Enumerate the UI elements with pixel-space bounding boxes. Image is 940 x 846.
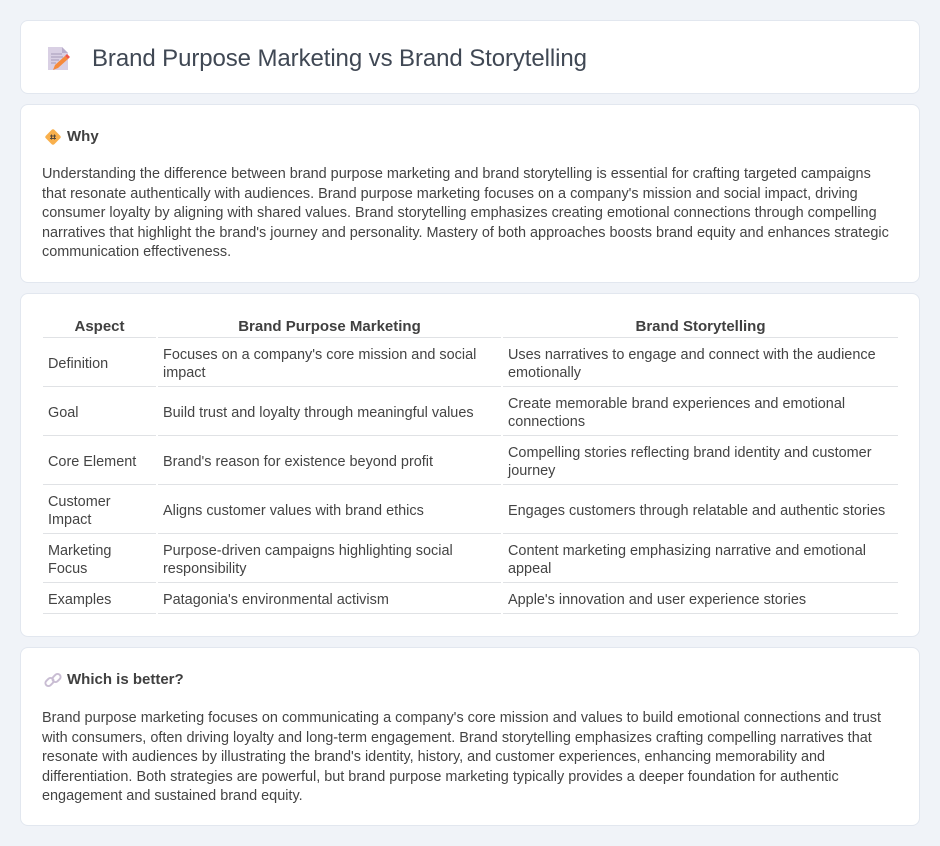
panel: comparison table — [20, 293, 920, 637]
row: examples: Examples — [48, 592, 111, 608]
row: goal: Build trust and loyalty through meaningful values — [163, 405, 474, 421]
row: customer impact: Aligns customer values with brand ethics — [163, 503, 424, 519]
row: core element: Compelling stories reflecting brand identity and customer — [508, 445, 872, 461]
row: examples: Apple's innovation and user experience stories — [508, 592, 806, 608]
row: marketing focus: responsibility — [163, 561, 246, 577]
text block: which is better paragraph: differentiation. Both strategies are powerful, but brand purpose marketing typically provides a deeper foundation for authentic — [42, 769, 839, 785]
header: aspect: Aspect — [74, 318, 125, 335]
icon: document with pencil — [48, 47, 70, 70]
row: definition: Definition — [48, 356, 108, 372]
text block: why paragraph: that resonate authentically with audiences. Brand purpose marketing focuses on a company's mission and social impact, driving — [42, 186, 858, 202]
text block: which is better paragraph: Brand purpose marketing focuses on communicating a company's core mission and values to build emotional connections and trust — [42, 710, 881, 726]
table header row — [74, 318, 766, 335]
header: brand storytelling: Brand Storytelling — [635, 318, 766, 335]
panel: title header — [20, 20, 920, 94]
row: definition: Uses narratives to engage and connect with the audience — [508, 347, 876, 363]
row: goal — [48, 396, 845, 430]
row: examples — [48, 592, 806, 608]
text block: which is better paragraph: with consumers, often driving loyalty and long-term engagement. Brand storytelling emphasizes crafting compelling narratives that — [42, 730, 872, 746]
row: customer impact: Impact — [48, 512, 91, 528]
row: customer impact — [48, 494, 885, 528]
row: marketing focus: Content marketing emphasizing narrative and emotional — [508, 543, 866, 559]
row: core element: journey — [508, 463, 555, 479]
row: marketing focus — [48, 543, 866, 577]
text block: why paragraph — [42, 166, 889, 260]
row: definition: impact — [163, 365, 206, 381]
row: core element: Brand's reason for existence beyond profit — [163, 454, 433, 470]
text block: why paragraph: Understanding the difference between brand purpose marketing and brand storytelling is essential for crafting targeted campaigns — [42, 166, 871, 182]
row: goal: Goal — [48, 405, 78, 421]
text block: why paragraph: communication effectiveness. — [42, 244, 231, 260]
row: customer impact: Engages customers through relatable and authentic stories — [508, 503, 885, 519]
row: goal: connections — [508, 414, 585, 430]
heading: why: Why — [67, 128, 99, 145]
title: Brand Purpose Marketing vs Brand Storytelling — [92, 45, 587, 72]
text block: which is better paragraph — [42, 710, 881, 804]
row: marketing focus: Marketing — [48, 543, 111, 559]
panel: which is better — [20, 647, 920, 826]
row: marketing focus: appeal — [508, 561, 551, 577]
row: definition: emotionally — [508, 365, 581, 381]
header: brand purpose marketing: Brand Purpose Marketing — [238, 318, 421, 335]
row: core element — [48, 445, 872, 479]
row: examples: Patagonia's environmental activism — [163, 592, 389, 608]
icon: orange diamond — [45, 129, 61, 145]
icon: chain link — [44, 673, 62, 687]
row: core element: Core Element — [48, 454, 136, 470]
row: definition: Focuses on a company's core mission and social — [163, 347, 476, 363]
text block: which is better paragraph: resonate with audiences by illustrating the brand's identity, history, and customer experiences, enhancing memorability and — [42, 749, 825, 765]
row: goal: Create memorable brand experiences and emotional — [508, 396, 845, 412]
row: customer impact: Customer — [48, 494, 111, 510]
text block: why paragraph: narratives that highlight the brand's journey and personality. Mastery of both approaches boosts brand equity and enhances strategic — [42, 225, 889, 241]
row: marketing focus: Focus — [48, 561, 87, 577]
row: definition — [48, 347, 876, 381]
heading: which is better: Which is better? — [67, 671, 184, 688]
text block: which is better paragraph: engagement and sustained brand equity. — [42, 788, 303, 804]
text block: why paragraph: consumer loyalty by aligning with shared values. Brand storytelling emphasizes creating emotional connections through compelling — [42, 205, 877, 221]
row: marketing focus: Purpose-driven campaigns highlighting social — [163, 543, 453, 559]
panel: why — [20, 104, 920, 283]
